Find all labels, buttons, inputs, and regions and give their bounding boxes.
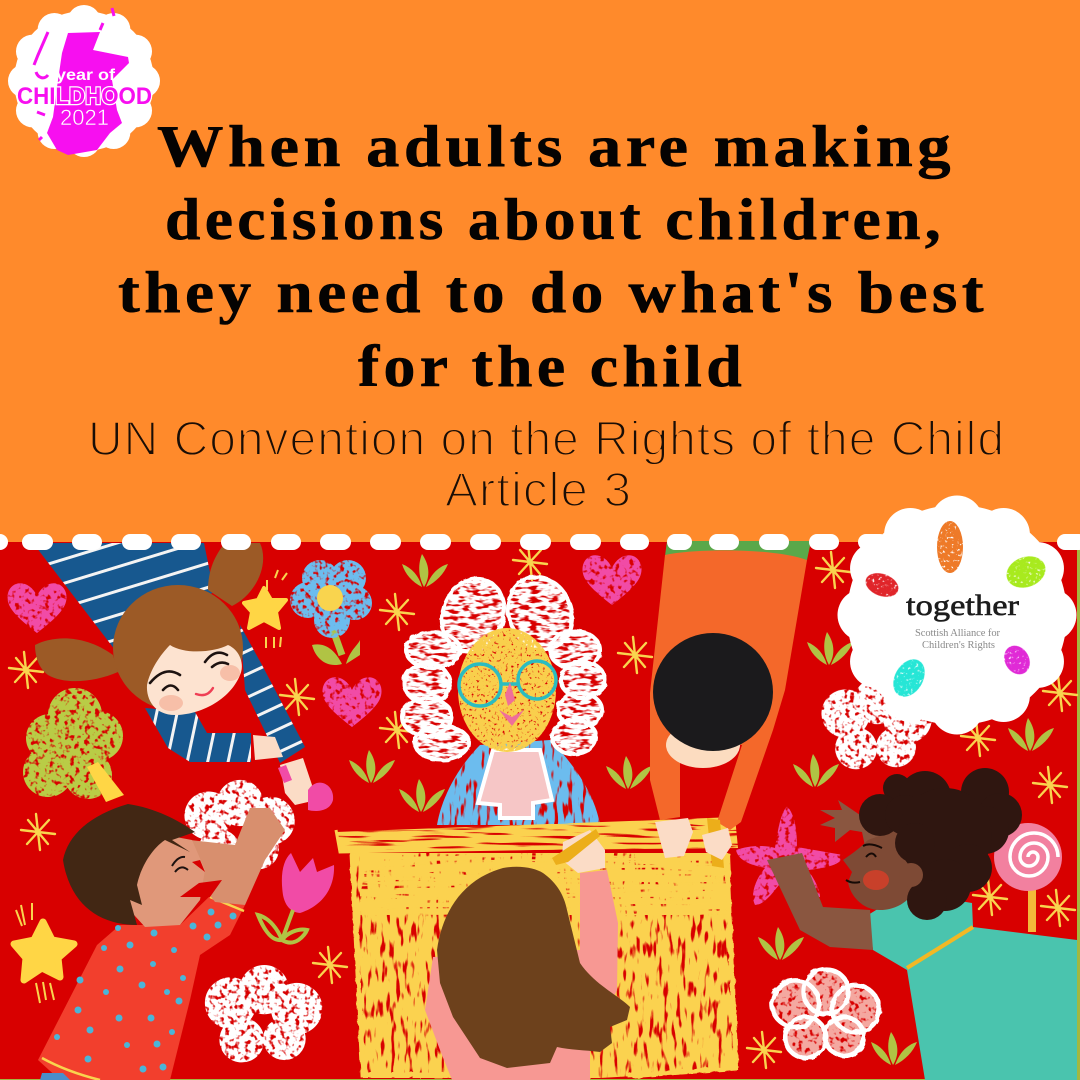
fingerprint: green: [1002, 551, 1050, 593]
boy shirt dots: [54, 908, 236, 1072]
Scotland islands: [34, 8, 114, 140]
icon: yellow crayon: [87, 762, 124, 802]
judge wig: [402, 567, 605, 760]
subtitle: UN Convention reference: [88, 413, 1005, 517]
girl right raised hand: [820, 800, 885, 860]
boy green trousers: [665, 541, 811, 560]
boy torso and arms: [650, 550, 807, 830]
icon: green scribble flower: [23, 688, 123, 799]
girl right arm: [767, 853, 873, 950]
fingerprint: cyan: [887, 654, 931, 702]
icon: blue flower: [290, 560, 372, 665]
illustration panel: children drawing a judge: [0, 541, 1080, 1080]
icon: yellow star flower with ticks: [244, 570, 287, 648]
chalk decorations: [7, 544, 1077, 1068]
boy mouth and gap: [180, 860, 222, 897]
boy hair: [63, 804, 195, 925]
lollipop: [994, 823, 1062, 932]
judge nose and mouth: [499, 682, 524, 726]
girl torso: [33, 543, 214, 650]
pink star drawing: [736, 806, 843, 905]
judge face: [458, 628, 556, 752]
title: for the child: [358, 333, 746, 399]
text: CHILDHOOD: CHILDHOOD: [17, 83, 152, 110]
Scotland map shape: [47, 32, 129, 155]
boy arm and fist: [190, 808, 285, 905]
girl arm right: [240, 625, 305, 763]
background: orange header: [0, 0, 1080, 542]
badge: Together logo: [838, 496, 1076, 734]
right and bottom edge strip: [0, 542, 1080, 1080]
fingerprint: magenta: [999, 641, 1035, 679]
girl arm left: [145, 708, 251, 762]
crayon: [552, 829, 600, 865]
fingerprint: orange: [937, 521, 963, 573]
boy eye: [172, 857, 188, 872]
girl features: [150, 653, 240, 711]
badge: Year of Childhood 2021: [8, 5, 160, 157]
text: Scottish Alliance for Children's Rights: [915, 628, 1000, 651]
girl hair: [113, 585, 243, 711]
subtitle: UN Convention reference: Article 3: [445, 464, 632, 517]
text: together: together: [906, 589, 1019, 622]
judge robe: [437, 740, 600, 825]
boy left: [38, 804, 285, 1080]
girl pigtail left: [35, 638, 118, 681]
boy ear: [117, 888, 137, 908]
girl right hair: [859, 768, 1022, 920]
girl bottom centre: [425, 829, 630, 1080]
girl hands and crayon: [253, 735, 283, 760]
judge glasses: [459, 661, 556, 706]
girl bottom body and arm: [425, 870, 618, 1080]
girl right face: [843, 830, 920, 910]
judge: [402, 567, 605, 825]
chalk clouds: [184, 678, 932, 1062]
text: year of: year of: [56, 67, 116, 84]
boy face: [125, 835, 205, 927]
perforated divider: [0, 534, 1080, 550]
title: When adults are making: [157, 113, 955, 179]
title: [118, 113, 988, 399]
desk body: [350, 853, 738, 1078]
girl bottom hair: [437, 867, 630, 1068]
desk scribble: [336, 817, 738, 1078]
title: they need to do what's best: [118, 259, 988, 325]
girl pigtail right: [208, 543, 263, 606]
subtitle: UN Convention reference: UN Convention on the Rights of the Child: [88, 413, 1005, 466]
girl bottom hand: [562, 830, 605, 873]
text: Scottish Alliance for Children's Rights: Children's Rights: [922, 640, 995, 651]
girl face: [147, 645, 242, 715]
boy face: [666, 722, 740, 768]
boy head: [653, 633, 773, 751]
boy top centre: [650, 541, 811, 868]
boy hands and crayon: [655, 818, 693, 858]
boy shirt: [38, 893, 245, 1080]
girl right: [767, 768, 1077, 1080]
girl right belt: [907, 927, 973, 968]
girl right dress: [868, 892, 1077, 1080]
text: 2021: 2021: [60, 105, 109, 130]
title: decisions about children,: [165, 186, 945, 252]
girl top left: [33, 543, 333, 811]
text: Scottish Alliance for Children's Rights: Scottish Alliance for: [915, 628, 1000, 639]
desk top band: [336, 817, 738, 852]
icon: yellow chalk flower: [14, 903, 74, 1003]
icon: pink tulip: [258, 853, 334, 943]
fingerprint: red: [862, 569, 902, 601]
judge jabot: [478, 750, 552, 818]
